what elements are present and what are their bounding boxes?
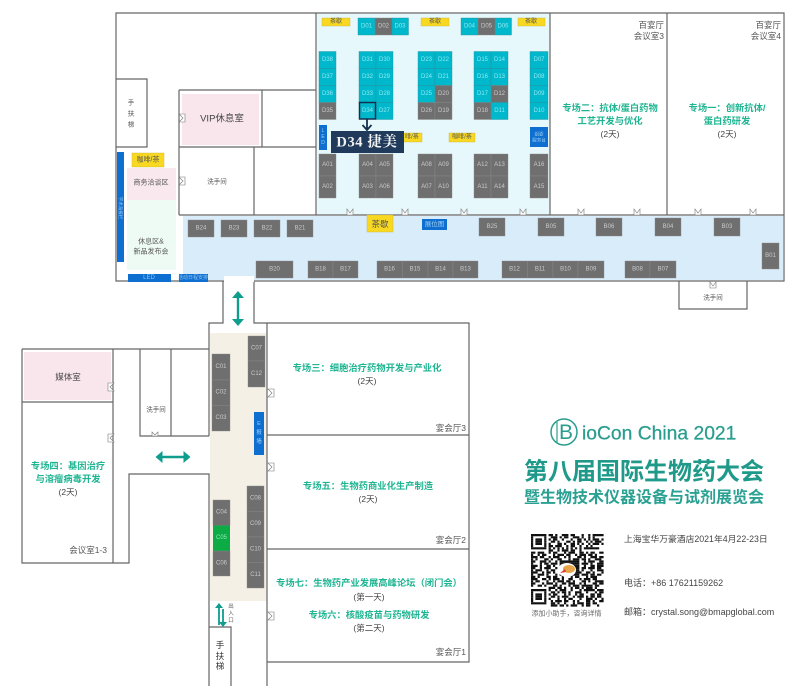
- booths: D23 to D19: [418, 52, 452, 120]
- booths: D23 to D19: D21: [438, 74, 450, 80]
- sign: booth map: 展位图: [425, 219, 444, 228]
- session 5 text: (2天): [359, 494, 378, 504]
- booths: B bottom row: [256, 261, 676, 278]
- booths: C left bottom: C04: [216, 510, 228, 516]
- booths: C left bottom: C06: [216, 560, 228, 566]
- signs: tea break yellow: [322, 17, 545, 142]
- booths: B bottom row: B20: [269, 266, 280, 272]
- session 6 text: [309, 609, 430, 633]
- booths: C left top: [212, 354, 230, 431]
- heading: conference title: 第八届国际生物药大会: [524, 458, 764, 486]
- booths: B bottom row: B11: [535, 266, 546, 272]
- booths: C right bottom: C08: [250, 496, 262, 502]
- room label: meeting room 4: 百宴厅: [755, 20, 781, 30]
- booths: D right column: D09: [533, 91, 545, 97]
- panel: corridor hall B background: [183, 216, 783, 280]
- logo: BioCon China 2021: ioCon China 2021: [582, 424, 736, 444]
- booths: D15 to D11: D18: [477, 108, 489, 114]
- session 5 text: 专场五：生物药商业化生产制造: [303, 480, 434, 491]
- label: entrance: 口: [228, 617, 234, 624]
- booths: C left top: C01: [215, 364, 227, 370]
- booths: A row: A05: [379, 162, 390, 168]
- sign: service point: 服务台: [532, 136, 546, 144]
- session 2 text: (2天): [601, 129, 620, 139]
- booths: C right bottom: C11: [250, 572, 261, 578]
- sign: LED hall: [319, 125, 327, 150]
- label: washroom upper left: 洗手间: [207, 176, 227, 186]
- booths: B top row: B01: [765, 253, 776, 259]
- booths: A row: A06: [379, 184, 390, 190]
- label: escalator upper: [128, 98, 135, 128]
- booths: D right column: [530, 52, 548, 120]
- booths: D31 to D27: [359, 52, 393, 120]
- QR caption: 添加小助手，咨询详情: [532, 608, 602, 618]
- room label: meeting room 4: [751, 20, 781, 41]
- sign: tea break large: [367, 215, 393, 232]
- booths: B bottom row: B18: [315, 266, 326, 272]
- room label: meeting room 3: 会议室3: [634, 31, 664, 41]
- booths: B top row: B04: [663, 224, 674, 230]
- label: escalator lower: 手: [216, 640, 225, 650]
- booths: B top row: B05: [546, 224, 557, 230]
- sign: activity board: 活动日程安排: [178, 274, 208, 281]
- label: washroom right: 洗手间: [703, 292, 723, 302]
- booths: D23 to D19: D23: [421, 57, 433, 63]
- session 2 text: 工艺开发与优化: [577, 115, 643, 126]
- booths: D right column: D07: [533, 57, 545, 63]
- sign: LED hall: D: [321, 140, 325, 146]
- booths: C left top: C03: [215, 415, 227, 421]
- booths: A row: A09: [438, 162, 449, 168]
- booths: D top row: [358, 18, 512, 35]
- venue and date: 上海宝华万豪酒店2021年4月22-23日: [624, 533, 768, 544]
- label: escalator lower: [216, 640, 225, 671]
- session 4 text: 专场四：基因治疗: [31, 460, 105, 471]
- booths: D15 to D11: D16: [477, 74, 489, 80]
- booths: C right bottom: C10: [250, 546, 262, 552]
- booths: C right top: [248, 336, 265, 387]
- booths: A row: A08: [421, 162, 432, 168]
- sign: LED hall: E: [321, 134, 325, 140]
- session 1 text: 专场一：创新抗体/: [689, 102, 766, 113]
- booths: D23 to D19: D24: [421, 74, 433, 80]
- booths: D23 to D19: D20: [438, 91, 450, 97]
- booths: B bottom row: B08: [632, 266, 643, 272]
- sign: corridor blue board: 墙: [256, 437, 262, 445]
- arrow: vertical connection: [232, 291, 244, 326]
- session 4 text: (2天): [59, 487, 78, 497]
- label: entrance: 出: [228, 602, 234, 610]
- panel: lounge and launch area: [127, 200, 176, 270]
- booths: D23 to D19: D25: [421, 91, 433, 97]
- booths: A row: A14: [494, 184, 505, 190]
- label: washroom lower left: 洗手间: [146, 404, 166, 414]
- label: media room: 媒体室: [55, 372, 81, 382]
- booth: D34 highlighted: D34: [362, 108, 374, 114]
- booths: A row: A13: [494, 162, 505, 168]
- booths: D top row: D04: [464, 24, 476, 30]
- panel: media room fill: [24, 352, 111, 400]
- room label: banquet hall 3: 宴会厅3: [436, 423, 466, 433]
- booths: D31 to D27: D32: [362, 74, 374, 80]
- room label: meeting rooms 1-3: 会议室1-3: [69, 545, 107, 555]
- booths: A row: A07: [421, 184, 432, 190]
- heading: conference subtitle: 暨生物技术仪器设备与试剂展览会: [524, 488, 764, 506]
- booths: D top row: D06: [497, 24, 509, 30]
- session 2 text: [562, 102, 658, 139]
- QR code: [531, 535, 604, 606]
- label: escalator upper: 扶: [128, 108, 135, 118]
- sign: corridor blue board: E: [257, 421, 261, 427]
- booths: B top row: B25: [487, 224, 498, 230]
- booths: C left bottom: [213, 500, 230, 576]
- booths: B top row: B03: [722, 224, 733, 230]
- session 1 text: (2天): [718, 129, 737, 139]
- session 4 text: [31, 460, 105, 497]
- booths: D15 to D11: D11: [494, 108, 505, 114]
- booths: A row: A15: [534, 184, 545, 190]
- label: escalator upper: 手: [128, 98, 135, 106]
- booths: B top row: B24: [196, 226, 207, 232]
- booths: D31 to D27: D31: [362, 57, 374, 63]
- booths: B top row: B22: [262, 226, 273, 232]
- booths: B bottom row: B09: [586, 266, 597, 272]
- session 2 text: 专场二：抗体/蛋白药物: [562, 102, 658, 113]
- booths: A row: A12: [477, 162, 488, 168]
- booths: B top row: [188, 218, 779, 269]
- session 7 text: (第一天): [353, 592, 385, 602]
- label: VIP lounge: VIP休息室: [200, 112, 244, 124]
- session 3 text: [293, 362, 442, 386]
- room label: banquet hall 1: 宴会厅1: [436, 647, 466, 657]
- sign: LED: LED: [143, 275, 156, 281]
- booths: A row: A04: [362, 162, 373, 168]
- booths: D top row: D03: [394, 24, 406, 30]
- session 3 text: 专场三：细胞治疗药物开发与产业化: [293, 362, 442, 373]
- booths: B bottom row: B15: [410, 266, 421, 272]
- booths: C left top: C02: [215, 390, 227, 396]
- booths: B bottom row: B07: [658, 266, 669, 272]
- booths: B bottom row: B16: [384, 266, 395, 272]
- phone: 电话：+86 17621159262: [624, 577, 723, 588]
- booths: C right top: C07: [251, 346, 263, 352]
- panel: lounge and launch area: 新品发布会: [134, 246, 168, 256]
- signs: tea break yellow: 咖啡/茶: [452, 132, 472, 140]
- session 6 text: 专场六：核酸疫苗与药物研发: [309, 609, 430, 620]
- signs: tea break yellow: 茶歇: [330, 17, 342, 25]
- arrow: horizontal connection: [156, 451, 190, 463]
- room label: meeting room 4: 会议室4: [751, 31, 781, 41]
- sign: LED hall: L: [322, 128, 325, 134]
- booths: A row: A16: [534, 162, 545, 168]
- panel: VIP lounge fill: [182, 94, 259, 145]
- booths: A row: A03: [362, 184, 373, 190]
- panel: corridor C background: [210, 333, 267, 601]
- sign: LED: [128, 274, 171, 282]
- booths: B top row: B23: [229, 226, 240, 232]
- sign: coffee tea left: [132, 153, 164, 167]
- booth: D34 highlighted: [360, 102, 376, 119]
- label: escalator upper: 梯: [128, 120, 135, 128]
- booths: D top row: D05: [481, 24, 493, 30]
- label: escalator lower: 梯: [216, 661, 225, 671]
- booths: D left column: D38: [322, 57, 334, 63]
- logo: BioCon China 2021: [551, 419, 736, 445]
- room label: meeting room 3: [634, 20, 664, 41]
- booths: C left bottom: C05: [216, 535, 228, 541]
- booths: B bottom row: B13: [460, 266, 471, 272]
- session 1 text: 蛋白药研发: [704, 115, 751, 126]
- booths: B bottom row: B10: [560, 266, 571, 272]
- session 3 text: (2天): [358, 376, 377, 386]
- booths: D31 to D27: D29: [379, 74, 391, 80]
- room label: meeting room 3: 百宴厅: [638, 20, 664, 30]
- label: entrance: 入: [228, 611, 234, 617]
- booths: D left column: D35: [322, 108, 334, 114]
- booths: D15 to D11: D13: [494, 74, 506, 80]
- email: 邮箱：crystal.song@bmapglobal.com: [624, 606, 774, 617]
- booths: B bottom row: B17: [340, 266, 351, 272]
- panel: business meeting area: 商务洽谈区: [134, 178, 168, 186]
- booths: D top row: D01: [361, 24, 373, 30]
- sign: service point: 组委: [534, 130, 544, 136]
- sign: left blue vertical bar: 学术海报栏: [117, 197, 124, 220]
- booths: D15 to D11: D14: [494, 57, 506, 63]
- booths: D31 to D27: D27: [379, 108, 391, 114]
- sign: booth map: [422, 219, 447, 230]
- booths: A row: A02: [322, 184, 333, 190]
- sign: tea break large: 茶歇: [371, 219, 389, 229]
- booths: A row: [319, 154, 548, 198]
- panel: lounge and launch area: 休息区&: [138, 236, 164, 246]
- booths: D31 to D27: D33: [362, 91, 374, 97]
- booths: D15 to D11: D15: [477, 57, 489, 63]
- signs: tea break yellow: 茶歇: [525, 17, 537, 25]
- booths: B bottom row: B12: [509, 266, 520, 272]
- booths: D right column: D10: [533, 108, 545, 114]
- booths: B bottom row: B14: [435, 266, 446, 272]
- panel: exhibition hall D/A background: [317, 14, 550, 215]
- sign: coffee tea left: 咖啡/茶: [137, 154, 159, 164]
- booths: D top row: D02: [378, 24, 390, 30]
- booths: A row: A01: [322, 162, 333, 168]
- door symbols: [108, 114, 756, 620]
- booths: D31 to D27: D30: [379, 57, 391, 63]
- booths: D31 to D27: D28: [379, 91, 391, 97]
- callout: D34 Jiemei: D34 捷美: [336, 132, 398, 150]
- sign: left blue vertical bar: [117, 152, 124, 262]
- booths: B top row: B21: [295, 226, 306, 232]
- session 6 text: (第二天): [353, 623, 385, 633]
- label: entrance: [228, 602, 234, 624]
- session 1 text: [689, 102, 766, 139]
- sign: corridor blue board: 报: [256, 428, 262, 436]
- booths: D left column: D36: [322, 91, 334, 97]
- arrows: entrance up and down: [215, 603, 227, 627]
- booths: C right bottom: [247, 486, 264, 588]
- sign: service point: [530, 127, 548, 147]
- booths: D right column: D08: [533, 74, 545, 80]
- signs: tea break yellow: 茶歇: [429, 17, 441, 25]
- sign: corridor blue board: [254, 412, 264, 455]
- session 5 text: [303, 480, 434, 504]
- booths: D left column: [319, 52, 336, 120]
- booths: D left column: D37: [322, 74, 334, 80]
- logo: BioCon China 2021: B: [559, 421, 573, 444]
- booths: D15 to D11: [474, 52, 508, 120]
- booths: D23 to D19: D26: [421, 108, 433, 114]
- session 4 text: 与溶瘤病毒开发: [35, 473, 101, 484]
- arrow: pointing to D34 label: [362, 119, 372, 130]
- callout: D34 Jiemei: [331, 131, 404, 153]
- booths: A row: A11: [477, 184, 488, 190]
- label: escalator lower: 扶: [216, 651, 225, 661]
- booths: C right bottom: C09: [250, 521, 262, 527]
- booths: B top row: B06: [604, 224, 615, 230]
- booths: D15 to D11: D17: [477, 91, 489, 97]
- booths: D23 to D19: D22: [438, 57, 450, 63]
- room label: banquet hall 2: 宴会厅2: [436, 535, 466, 545]
- booths: A row: A10: [438, 184, 449, 190]
- booths: D23 to D19: D19: [438, 108, 450, 114]
- session 7 text: 专场七：生物药产业发展高峰论坛（闭门会）: [276, 577, 462, 588]
- booths: D15 to D11: D12: [494, 91, 506, 97]
- session 7 text: [276, 577, 462, 602]
- signs: tea break yellow: 啡/茶: [405, 132, 419, 140]
- booths: C right top: C12: [251, 371, 263, 377]
- panel: business meeting area: [127, 168, 176, 200]
